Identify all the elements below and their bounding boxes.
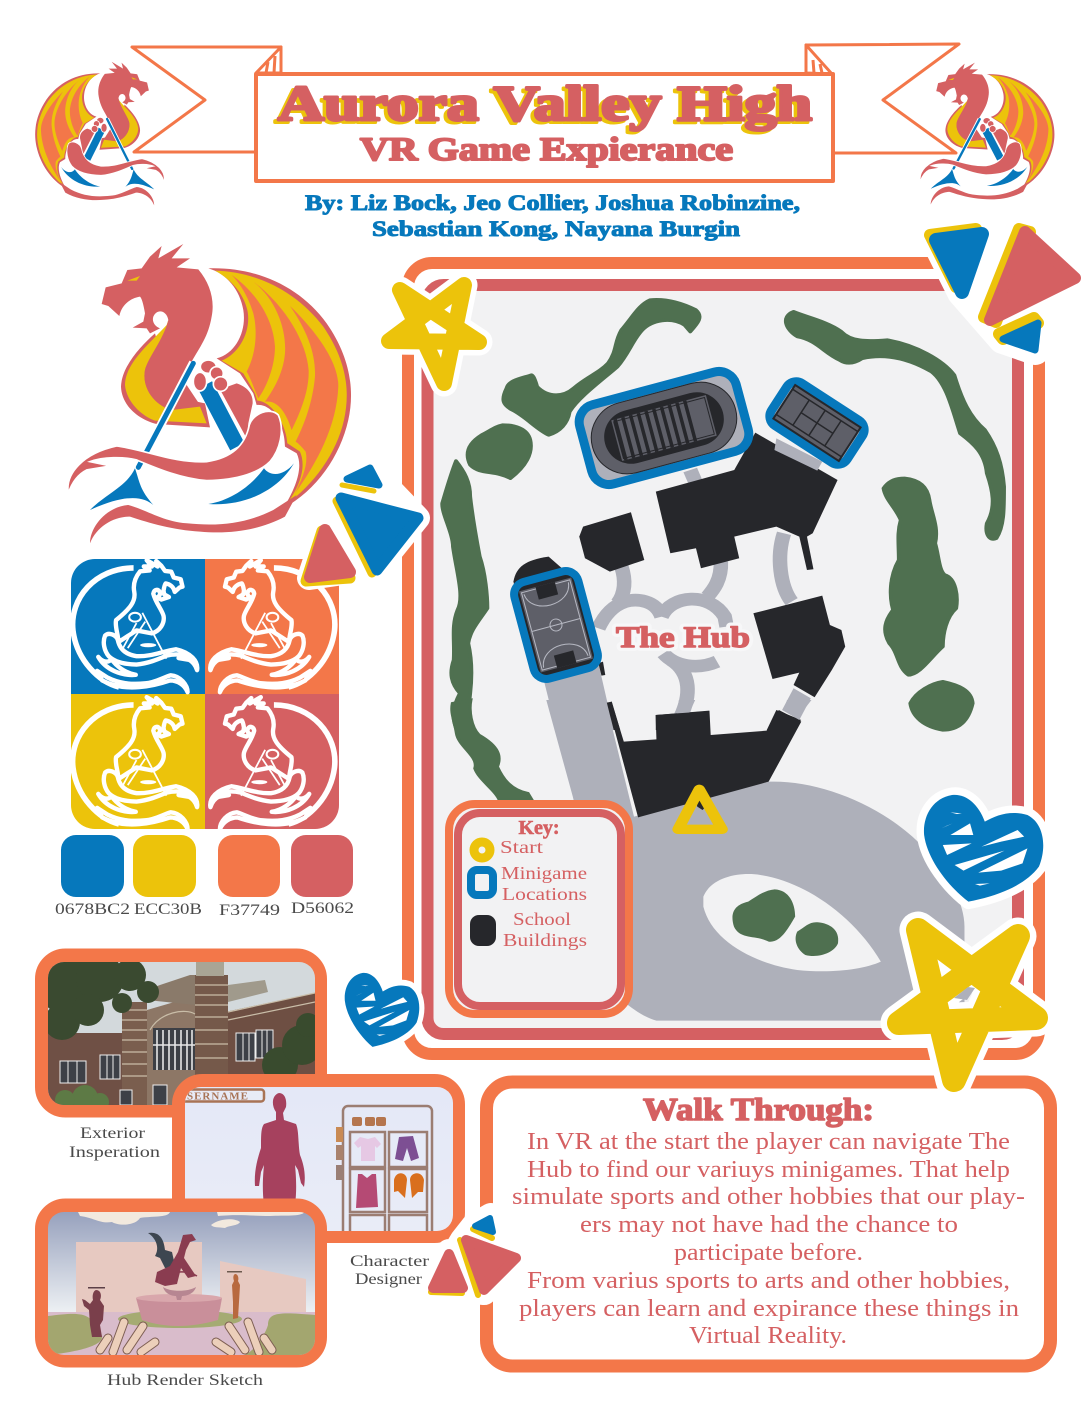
minigame: stadium [575,367,753,489]
clouds [78,1212,305,1228]
emblem yellow [73,697,197,829]
yellow accent red [306,531,350,581]
start marker [678,789,722,829]
right ribbon fold [806,45,832,74]
icon: start marker [474,842,490,858]
sticker: triangles top right [930,229,1075,350]
header banner [132,44,959,181]
blue quadrant [71,559,205,694]
walk through body: participate before. [674,1240,863,1266]
swatch orange [218,835,280,897]
label: The Hub: The Hub [616,621,750,654]
wardrobe items [354,1136,424,1208]
caption: character designer: Designer [355,1271,423,1288]
orange quadrant [205,559,339,694]
corridors [677,700,811,718]
walkway and plaza [546,700,964,1021]
yellow quadrant [71,694,205,829]
title: Aurora Valley High: Aurora Valley High [274,78,809,134]
subtitle: VR Game Expierance [360,132,733,168]
chart: campus map [442,300,1004,1021]
blue [475,1218,493,1232]
trees lower left [452,700,532,800]
small blue triangle [1003,323,1038,350]
ground [48,1312,315,1355]
caption: hub render sketch: Hub Render Sketch [107,1372,263,1389]
title: Aurora Valley High: Aurora Valley High [278,75,812,131]
caption: exterior inspiration: Insperation [69,1144,160,1161]
photo panel: character designer [176,1080,458,1246]
frame [42,1205,320,1361]
avatar right [232,1274,240,1319]
blue triangle [936,234,982,292]
sticker: large blue heart [924,795,1043,902]
school buildings [513,433,845,730]
panel: walk through [486,1082,1050,1366]
emblem orange [210,560,335,692]
sticker: small blue heart [345,973,419,1047]
red small [433,1254,463,1288]
walk through frame [486,1082,1050,1366]
halo [309,468,418,578]
background buildings [76,1242,202,1312]
authors: By: Liz Bock, Jeo Collier, Joshua Robinzine, [305,190,800,215]
yellow accents [431,1229,492,1295]
key label buildings [503,909,587,950]
authors [305,190,800,241]
walk through body: ers may not have had the chance to [580,1212,958,1238]
label: The Hub: The Hub [616,621,750,654]
frame [178,1080,458,1236]
caption: exterior inspiration: Exterior [80,1125,146,1142]
left ribbon fold [256,47,281,73]
minigame: tennis court [766,378,868,468]
swatch yellow [133,835,196,897]
walk through body: Virtual Reality. [689,1323,847,1349]
username label: USERNAME [178,1090,248,1102]
key label buildings: Buildings [503,930,587,950]
walk through body [512,1129,1025,1349]
icon: large dragon logo [68,244,351,543]
hex label: F37749 [219,902,280,919]
key outer frame [449,804,629,1014]
halo [936,232,1075,350]
right ribbon tail [806,44,959,153]
emblem blue [73,560,197,692]
icon: header dragon left [35,62,164,205]
walk through body: In VR at the start the player can navigate The [527,1129,1010,1155]
left ribbon tail [132,47,281,152]
colour palette swatches [55,835,354,919]
emblem red [210,697,335,829]
character silhouette [255,1093,305,1205]
sticker: large yellow star [899,930,1036,1080]
road connector [774,438,822,471]
walk through body: simulate sports and other hobbies that our play- [512,1184,1025,1210]
trees [442,300,1004,730]
small blue [347,468,379,485]
username box [176,1090,264,1102]
halo [433,1216,518,1292]
school photograph [48,962,315,1105]
red triangle [990,232,1075,320]
authors: Sebastian Kong, Nayana Burgin [372,216,740,241]
character designer render [185,1087,453,1231]
walk through body: From varius sports to arts and other hobbies, [527,1268,1010,1294]
icon: minigame marker [471,870,493,895]
panel: map key [449,804,629,1014]
map lower region [452,700,973,1021]
wardrobe category tabs [336,1117,386,1180]
sticker: star top left [389,285,479,383]
caption: character designer: Character [350,1253,430,1270]
bush [911,700,973,730]
key heading: Key: [518,817,560,839]
red large [466,1240,516,1290]
minigame: basketball court [511,568,601,682]
outer orange frame [408,263,1039,1054]
avatar left [82,1290,104,1337]
red [310,530,350,577]
map upper region [442,300,1004,730]
key label minigame: Minigame [501,863,587,883]
hub render scene [48,1212,315,1355]
building notch [695,795,707,810]
walk through heading: Walk Through: [643,1091,874,1127]
inner red frame [428,285,1018,1034]
walk through body: players can learn and expirance these things in [519,1296,1019,1322]
swatch red [291,835,353,897]
key label start: Start [500,837,543,857]
key label minigame [501,863,587,904]
yellow accent big blue [337,501,372,573]
panel: campus map frame [408,263,1039,1054]
title box [256,74,833,181]
red quadrant [205,694,339,829]
icon: building marker [470,915,496,946]
main plaza walkway [543,663,614,730]
big blue [341,498,418,570]
sticker: triangles near logo [306,468,418,581]
key inner frame [458,813,621,1006]
lower school building [607,702,801,817]
swatch blue [61,835,124,897]
garden trees [732,889,838,956]
photo frame [42,955,320,1111]
hex label: D56062 [291,900,354,917]
wardrobe panel [343,1106,432,1246]
yellow accents [342,485,374,491]
dragon statue [148,1233,197,1286]
hex label: 0678BC2 [55,901,130,918]
VR hands [100,1322,272,1352]
hex label: ECC30B [134,901,202,918]
central garden [703,874,881,971]
yellow accents [930,229,1038,339]
road connector [782,688,811,720]
caption: character designer [350,1253,430,1288]
fountain [136,1287,222,1326]
photo panel: hub render sketch [42,1205,320,1361]
key label buildings: School [513,909,571,929]
walk through body: Hub to find our variuys minigames. That help [527,1157,1010,1183]
panel: logo colour variations [71,559,339,829]
sticker: triangles near walk through [431,1216,518,1295]
key label minigame: Locations [502,884,587,904]
icon: header dragon right [920,63,1054,205]
photo panel: exterior inspiration [38,954,322,1111]
roads [598,470,792,717]
caption: exterior inspiration [69,1125,160,1161]
